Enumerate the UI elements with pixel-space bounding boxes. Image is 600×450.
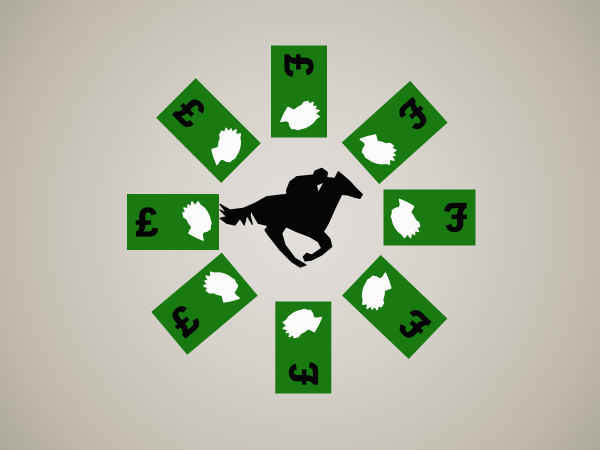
banknote: bottom left [151,253,258,355]
banknote: top right: £ [390,91,436,138]
banknote: top [271,46,327,138]
banknote: bottom right [342,255,447,359]
banknote: bottom right: £ [391,301,437,348]
banknote: top: £ [276,54,320,77]
banknote: bottom [275,302,331,394]
banknote: right [384,190,476,246]
banknote: top left: £ [166,89,213,136]
icon: racehorse and jockey silhouette [220,168,362,267]
banknote: bottom left: £ [163,297,208,345]
banknote: right: £ [444,194,467,238]
banknote: left: £ [136,201,158,245]
banknote: top right [342,81,448,184]
banknote: bottom: £ [282,362,326,385]
banknote: left [127,194,219,250]
banknote: top left [156,78,261,183]
